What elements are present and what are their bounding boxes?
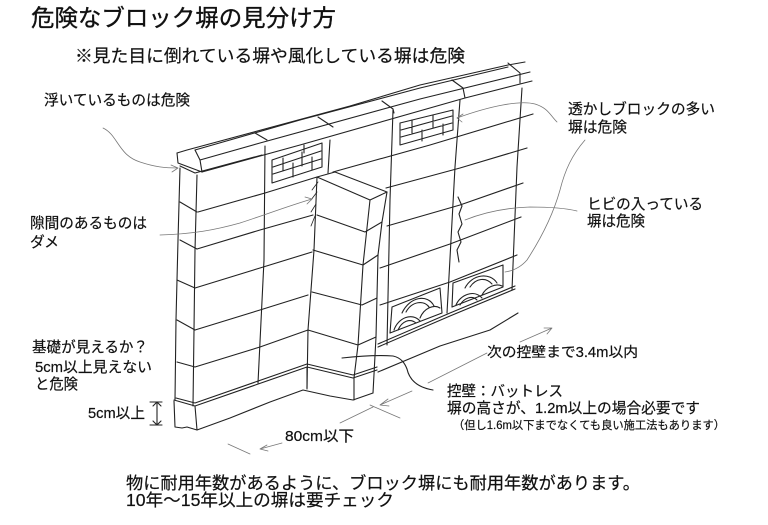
label: buttress explanation: 控壁：バットレス [447, 383, 563, 400]
leader: transparent blocks [457, 103, 557, 122]
label: gaps [30, 215, 147, 251]
footer note: 10年～15年以上の塀は要チェック [126, 491, 394, 510]
vent block: upper left [272, 143, 322, 183]
dimension arrows: 80cm [228, 391, 412, 454]
label: next buttress: 次の控壁まで3.4m以内 [487, 344, 638, 361]
label: transparent blocks [568, 100, 715, 136]
buttress [307, 172, 387, 393]
title: 危険なブロック塀の見分け方 [31, 5, 336, 31]
dimension mark: 5cm [150, 402, 162, 425]
leader: cracks [465, 207, 577, 220]
label: cracks [587, 196, 703, 230]
leader: floating cap [103, 128, 178, 172]
label: foundation [32, 339, 152, 393]
label: buttress explanation: （但し1.6m以下までなくても良い施工法もあります） [453, 419, 725, 432]
plinth [174, 286, 518, 430]
label: buttress explanation: 塀の高さが、1.2m以上の場合必要です [447, 400, 700, 417]
subtitle: ※見た目に倒れている塀や風化している塀は危険 [75, 46, 465, 66]
vent block: lower left wave pattern [390, 288, 442, 333]
illustration: block wall with buttress [174, 62, 533, 430]
label: foundation: 5cm以上見えない [35, 359, 152, 376]
arrow: next buttress distance [428, 328, 552, 383]
buttress leader [342, 356, 433, 390]
label: 5cm height: 5cm以上 [88, 405, 145, 422]
footer note [126, 473, 640, 510]
wall cap [177, 62, 532, 173]
label: transparent blocks: 透かしブロックの多い [568, 100, 715, 118]
label: cracks: ヒビの入っている [587, 196, 703, 213]
label: floating cap: 浮いているものは危険 [44, 92, 190, 109]
leader: decorative vent [505, 140, 585, 272]
label: gaps: 隙間のあるものは [30, 215, 147, 232]
vent block: lower right wave pattern [452, 265, 503, 307]
label: gaps: ダメ [30, 234, 59, 251]
label: cracks: 塀は危険 [587, 213, 645, 230]
leader: gaps [160, 197, 312, 235]
crack [457, 197, 462, 262]
wall blocks: left face and courses [175, 88, 533, 406]
label: buttress explanation [447, 383, 725, 432]
vent block: upper right [400, 110, 453, 145]
label: 80cm: 80cm以下 [285, 429, 354, 445]
footer note: 物に耐用年数があるように、ブロック塀にも耐用年数があります。 [126, 473, 640, 493]
label: foundation: 基礎が見えるか？ [32, 339, 148, 356]
label: foundation: と危険 [35, 376, 78, 393]
label: transparent blocks: 塀は危険 [568, 119, 627, 136]
